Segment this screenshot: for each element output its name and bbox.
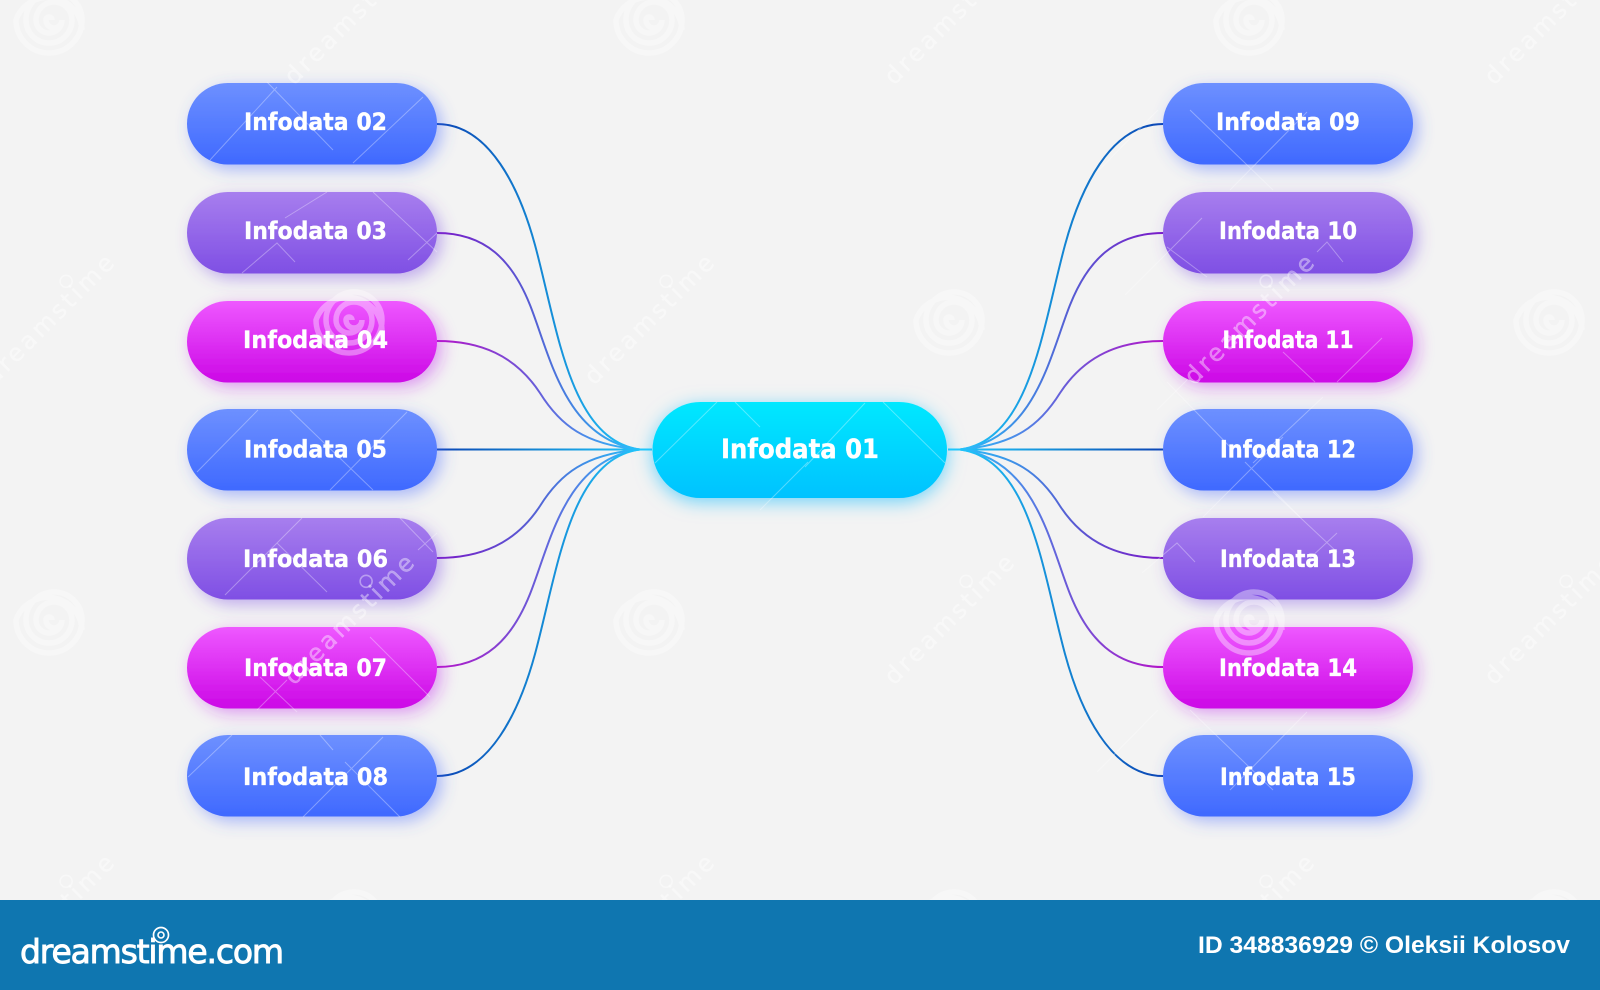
node: Infodata 09 [1163, 83, 1413, 164]
node: Infodata 02 [187, 83, 437, 164]
footer bar [0, 900, 1600, 990]
watermark overlay: dreamstime [1178, 849, 1320, 990]
node: Infodata 02: Infodata 02 [244, 108, 387, 136]
node: Infodata 11: Infodata 11 [1222, 326, 1354, 354]
node: Infodata 07 [187, 627, 437, 708]
node: Infodata 05 [187, 409, 437, 490]
node: Infodata 07: Infodata 07 [244, 654, 387, 682]
node: Infodata 15: Infodata 15 [1220, 763, 1356, 791]
center node: Infodata 01 [652, 402, 947, 498]
watermark overlay: dreamstime [878, 549, 1020, 690]
watermark overlay: dreamstime [578, 249, 720, 390]
node: Infodata 08 [187, 735, 437, 816]
watermark overlay: dreamstime [1178, 249, 1320, 390]
watermark overlay: dreamstime [278, 549, 420, 690]
watermark overlay: dreamstime [578, 849, 720, 990]
node: Infodata 05: Infodata 05 [244, 436, 387, 464]
node: Infodata 13 [1163, 518, 1413, 600]
image id and credit: ID 348836929 © Oleksii Kolosov [1198, 932, 1571, 959]
node: Infodata 15 [1163, 735, 1413, 816]
connectors: right branches [948, 124, 1163, 776]
right column nodes [1163, 83, 1413, 816]
logo: dreamstime.com: dreamstime.com [20, 932, 284, 971]
left column nodes [187, 83, 437, 816]
node: Infodata 11 [1163, 301, 1413, 382]
node: Infodata 14: Infodata 14 [1219, 654, 1357, 682]
node: Infodata 06 [187, 518, 437, 600]
center node: Infodata 01: Infodata 01 [721, 434, 879, 465]
node: Infodata 13: Infodata 13 [1220, 545, 1356, 573]
node: Infodata 06: Infodata 06 [243, 545, 388, 573]
node: Infodata 14 [1163, 627, 1413, 708]
node: Infodata 12 [1163, 409, 1413, 490]
node: Infodata 09: Infodata 09 [1216, 108, 1360, 136]
node: Infodata 10 [1163, 192, 1413, 274]
node: Infodata 08: Infodata 08 [243, 763, 388, 791]
node: Infodata 03: Infodata 03 [244, 217, 387, 245]
node: Infodata 12: Infodata 12 [1220, 436, 1356, 464]
node: Infodata 10: Infodata 10 [1219, 217, 1357, 245]
connectors: left branches [437, 124, 652, 776]
node: Infodata 04: Infodata 04 [243, 326, 388, 354]
node: Infodata 04 [187, 301, 437, 382]
node: Infodata 03 [187, 192, 437, 274]
